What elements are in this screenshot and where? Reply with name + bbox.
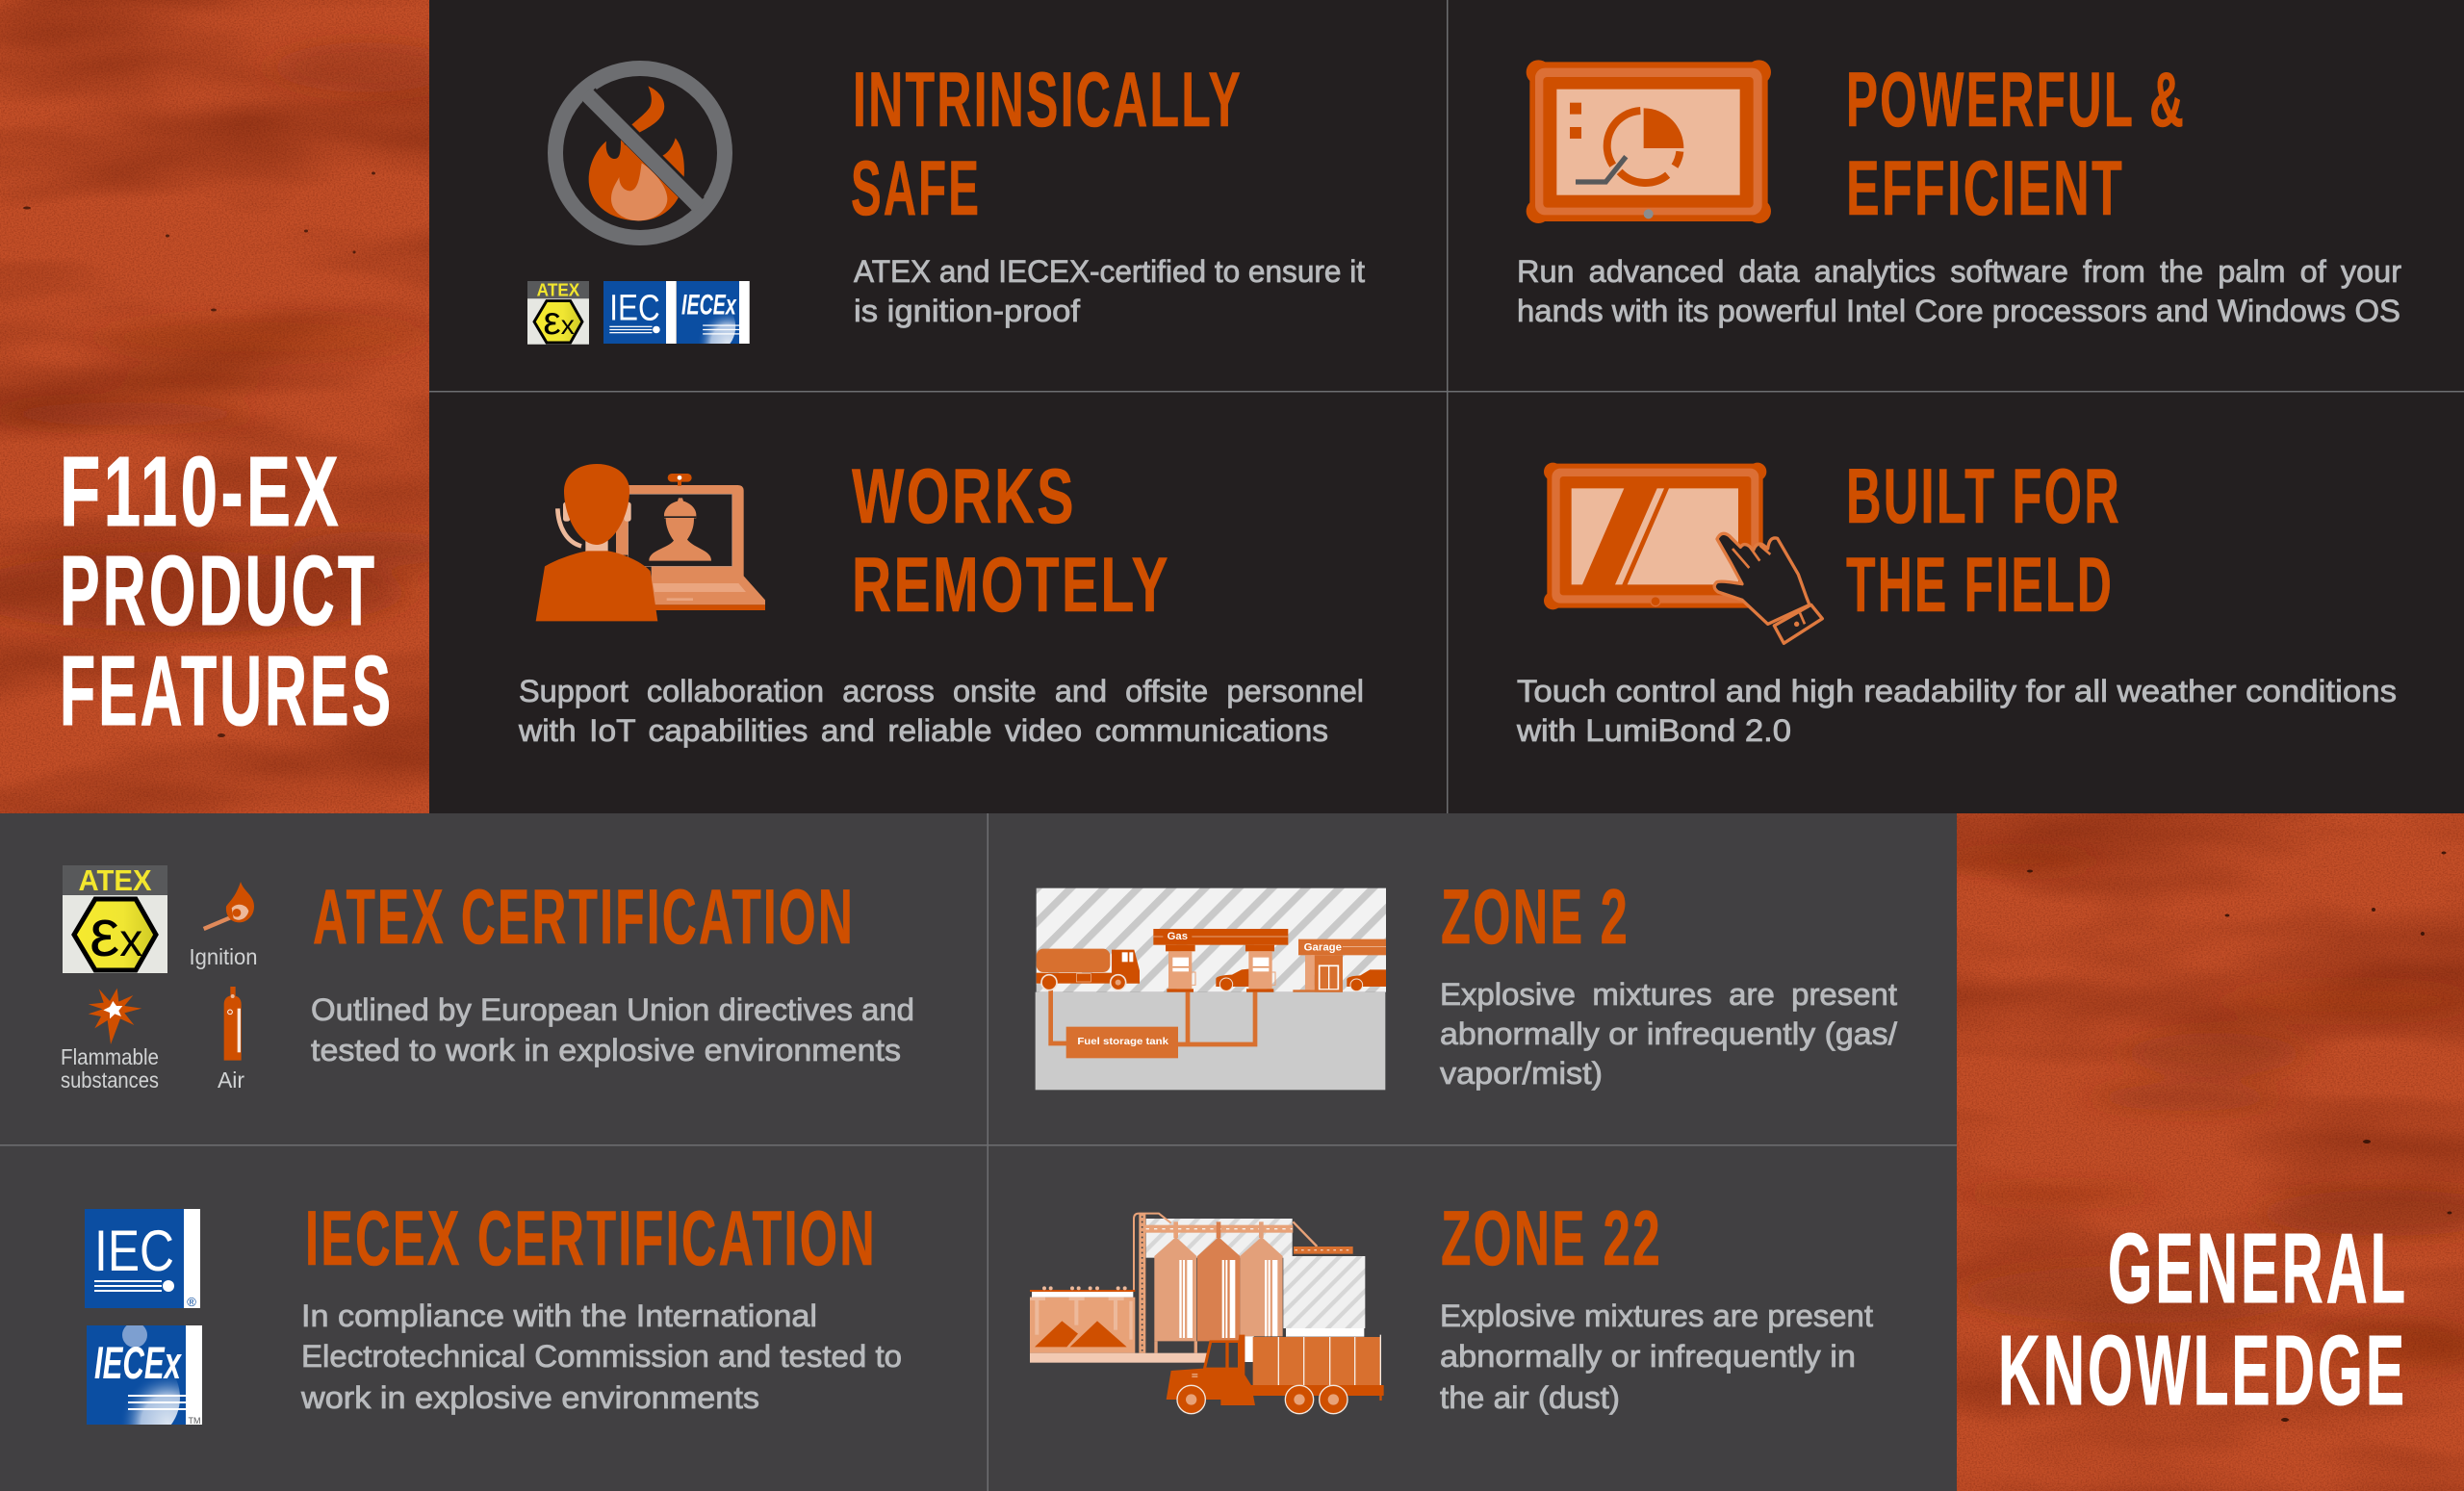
text: ATEX description xyxy=(311,992,914,1067)
illustration: fuel station: Garage xyxy=(1304,941,1342,953)
illustration: fuel station xyxy=(1036,888,1386,1090)
panel: dark feature background xyxy=(429,0,2464,813)
text: powerful and efficient description xyxy=(1517,254,2401,328)
text: works remotely description: with IoT capabilities and reliable video communications xyxy=(518,713,1328,748)
icon: ATEX badge small: ATEX xyxy=(537,280,579,299)
text: zone 2 description xyxy=(1440,977,1897,1091)
icon: tablet with chart xyxy=(1527,60,1771,223)
illustration: fuel station: Fuel storage tank xyxy=(1077,1037,1168,1047)
text: zone 22 description: the air (dust) xyxy=(1440,1380,1620,1415)
heading: general knowledge xyxy=(2002,1232,2404,1405)
label: air: Air xyxy=(218,1067,244,1093)
icon: IECEx logo large: TM xyxy=(189,1416,200,1426)
heading: powerful and efficient: EFFICIENT xyxy=(1846,145,2124,232)
heading: works remotely: WORKS xyxy=(852,453,1076,540)
text: zone 22 description: Explosive mixtures are present xyxy=(1440,1298,1873,1333)
panel: product features title xyxy=(0,0,462,813)
icon: ATEX badge large xyxy=(63,863,167,973)
heading: built for the field xyxy=(1846,453,2121,629)
panel: works remotely xyxy=(518,453,1364,748)
text: intrinsically safe description: is ignition-proof xyxy=(854,294,1080,328)
icon: air cylinder xyxy=(224,987,242,1061)
icon: remote video call xyxy=(536,464,765,621)
text: IECEx description: Electrotechnical Commission and tested to xyxy=(301,1339,902,1374)
panel: zone 22 xyxy=(1030,1195,1873,1415)
heading: built for the field: BUILT FOR xyxy=(1846,453,2121,540)
text: IECEx description: In compliance with the International xyxy=(301,1298,817,1333)
icon: IEC logo large xyxy=(85,1209,200,1309)
heading: IECEx certification: IECEX CERTIFICATION xyxy=(305,1195,877,1282)
label: ignition: Ignition xyxy=(189,944,258,969)
label: flammable substances xyxy=(61,1044,159,1093)
icon: ignition match xyxy=(204,882,254,929)
label: flammable substances: Flammable xyxy=(61,1044,159,1069)
text: built for the field description: with LumiBond 2.0 xyxy=(1516,713,1791,748)
heading: intrinsically safe: INTRINSICALLY xyxy=(853,57,1243,143)
heading: powerful and efficient xyxy=(1846,57,2186,232)
panel: powerful and efficient xyxy=(1517,57,2401,328)
panel: IECEx certification xyxy=(85,1209,901,1425)
illustration: silos and dump truck xyxy=(1030,1213,1384,1414)
panel: ATEX certification xyxy=(61,863,914,1093)
text: works remotely description xyxy=(518,674,1364,748)
heading: F110-EX product features: PRODUCT xyxy=(60,535,377,646)
heading: F110-EX product features: FEATURES xyxy=(60,635,394,746)
illustration: fuel station: Gas xyxy=(1168,931,1188,942)
panel: gray knowledge background xyxy=(0,813,1958,1491)
icon: IECEx logo small: IECEx xyxy=(681,290,737,321)
heading: intrinsically safe xyxy=(851,57,1243,232)
panel: general knowledge title xyxy=(1944,813,2464,1491)
panel: built for the field xyxy=(1516,453,2397,748)
text: intrinsically safe description: ATEX and IECEX-certified to ensure it xyxy=(854,254,1365,289)
icon: IEC logo small: IEC xyxy=(609,288,660,328)
heading: works remotely xyxy=(852,453,1170,629)
label: flammable substances: substances xyxy=(61,1067,159,1093)
text: works remotely description: Support collaboration across onsite and offsite personnel xyxy=(519,674,1364,708)
heading: intrinsically safe: SAFE xyxy=(851,145,981,232)
text: zone 22 description: abnormally or infrequently in xyxy=(1440,1339,1856,1374)
text: zone 2 description: Explosive mixtures are present xyxy=(1440,977,1897,1012)
text: powerful and efficient description: Run advanced data analytics software from the palm of your xyxy=(1517,254,2401,289)
text: intrinsically safe description xyxy=(854,254,1365,328)
heading: zone 2: ZONE 2 xyxy=(1441,874,1630,961)
icon: ATEX badge small: εx xyxy=(543,298,575,343)
heading: zone 22: ZONE 22 xyxy=(1441,1195,1662,1282)
icon: no fire xyxy=(555,68,725,238)
icon: IEC logo small xyxy=(603,281,677,344)
text: zone 2 description: vapor/mist) xyxy=(1440,1056,1603,1091)
text: ATEX description: tested to work in explosive environments xyxy=(311,1033,901,1067)
icon: ATEX badge large: ATEX xyxy=(79,863,152,897)
text: IECEx description: work in explosive environments xyxy=(300,1380,759,1415)
text: powerful and efficient description: hands with its powerful Intel Core processors and Windows OS xyxy=(1517,294,2400,328)
heading: works remotely: REMOTELY xyxy=(852,542,1170,629)
text: IECEx description xyxy=(300,1298,902,1415)
icon: IECEx logo large: IECEx xyxy=(94,1337,182,1388)
heading: built for the field: THE FIELD xyxy=(1846,542,2114,629)
heading: F110-EX product features: F110-EX xyxy=(60,436,342,547)
icon: ATEX badge small xyxy=(527,280,589,345)
heading: F110-EX product features xyxy=(64,456,389,726)
icon: flammable burst xyxy=(89,989,141,1044)
icon: IEC logo large: IEC xyxy=(94,1219,174,1283)
icon: tablet with touching hand xyxy=(1544,463,1822,643)
text: ATEX description: Outlined by European Union directives and xyxy=(311,992,914,1027)
icon: ATEX badge large: εx xyxy=(90,895,142,970)
icon: IEC logo large: ® xyxy=(187,1295,196,1309)
text: built for the field description: Touch control and high readability for all weather conditions xyxy=(1517,674,2397,708)
heading: ATEX certification: ATEX CERTIFICATION xyxy=(313,874,855,961)
text: zone 22 description xyxy=(1440,1298,1873,1415)
icon: IECEx logo large xyxy=(87,1325,202,1425)
panel: zone 2 xyxy=(1036,874,1897,1091)
panel: intrinsically safe xyxy=(527,57,1365,354)
icon: IECEx logo small xyxy=(677,281,750,344)
text: built for the field description xyxy=(1516,674,2397,748)
heading: powerful and efficient: POWERFUL & xyxy=(1846,57,2186,143)
text: zone 2 description: abnormally or infrequently (gas/ xyxy=(1440,1016,1897,1051)
